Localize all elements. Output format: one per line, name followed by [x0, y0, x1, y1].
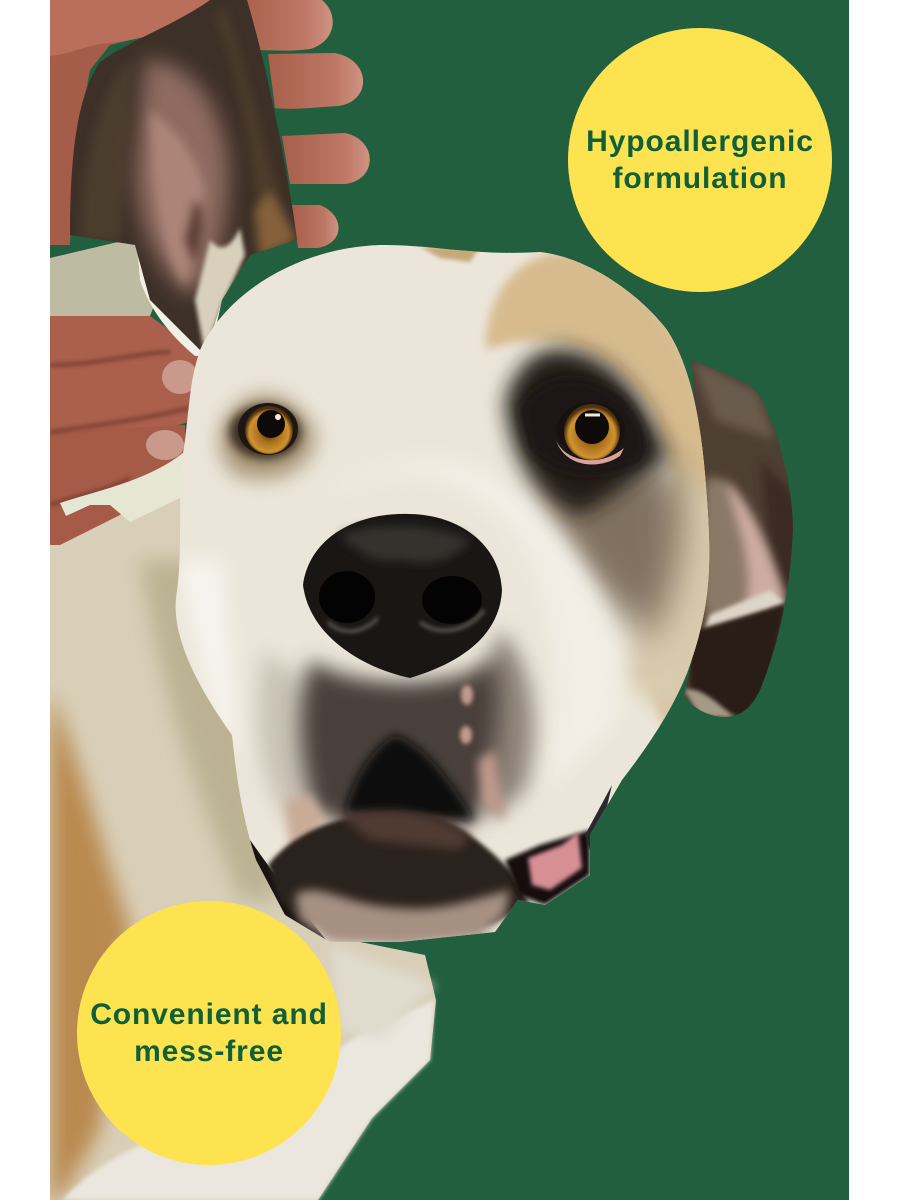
speckled grey side of muzzle: [250, 652, 308, 820]
callout: hypoallergenic formulation: formulation: [613, 162, 787, 195]
callout: hypoallergenic formulation: [568, 28, 832, 292]
dog body and chest: [50, 495, 436, 1200]
callout: convenient and mess-free: [77, 901, 341, 1165]
hand: fingers behind ear: [50, 0, 370, 545]
callout: convenient and mess-free: Convenient and: [90, 998, 328, 1031]
ear: lifted left ear: [70, 0, 297, 350]
nose: [303, 514, 502, 678]
callout: hypoallergenic formulation: Hypoallergenic: [586, 125, 814, 158]
grey-brown cheek under dark patch: [525, 460, 681, 640]
dog right ear: [684, 360, 793, 717]
wipe: white cloth in fingers: [50, 238, 222, 522]
tan right side: [486, 252, 720, 730]
shading at left eye: [220, 394, 315, 479]
dog head: [176, 245, 710, 942]
brighter fur along nose bridge: [442, 468, 626, 764]
muzzle and mouth: [250, 660, 612, 945]
right eye: [556, 402, 625, 464]
callout: convenient and mess-free: mess-free: [134, 1035, 284, 1068]
dark mask around right eye: [505, 349, 668, 515]
left eye: [229, 403, 301, 459]
